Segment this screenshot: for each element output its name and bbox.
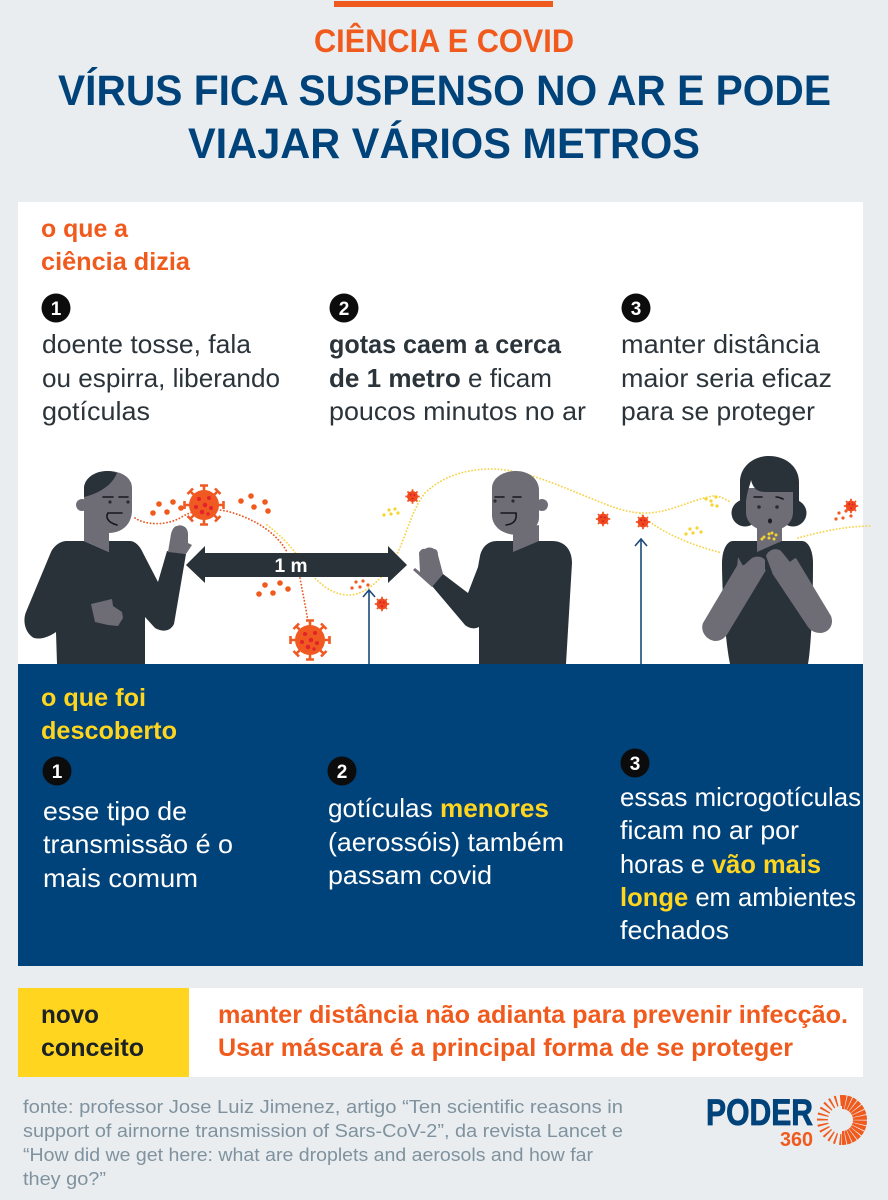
- step 3: [621, 294, 832, 426]
- source: they go?”: [23, 1168, 106, 1189]
- panel: o que a ciência dizia: [18, 202, 863, 664]
- step 1: doente tosse, fala: [42, 329, 252, 359]
- person: speaker left: [24, 471, 192, 664]
- step 3: para se proteger: [621, 396, 815, 426]
- finding 1: esse tipo de: [43, 796, 187, 826]
- arrow: 1 m distance: [186, 546, 407, 583]
- step 2: gotas caem a cerca: [329, 329, 562, 359]
- heading: o que foi descoberto: descoberto: [41, 717, 177, 745]
- person: listener middle: [413, 471, 572, 664]
- step 1: gotículas: [42, 396, 150, 426]
- top accent bar: [334, 1, 553, 7]
- arrow: 1 m distance: 1 m: [274, 556, 308, 577]
- droplets: orange: [150, 493, 853, 597]
- finding 1: transmissão é o: [43, 829, 233, 859]
- step 3: maior seria eficaz: [621, 363, 832, 393]
- step 1: 1: [51, 299, 62, 320]
- conclusion text: Usar máscara é a principal forma de se proteger: [218, 1034, 793, 1062]
- virus particles: [184, 485, 858, 660]
- label: novo conceito: [18, 988, 189, 1077]
- arrow: up short: [363, 590, 375, 664]
- step 2: 2: [339, 299, 349, 320]
- step 2: poucos minutos no ar: [329, 396, 586, 426]
- finding 2: 2: [337, 762, 347, 783]
- kicker: CIÊNCIA E COVID: [314, 23, 574, 59]
- panel: novo conceito: [18, 988, 863, 1077]
- step 3: 3: [631, 299, 641, 320]
- finding 1: mais comum: [43, 863, 198, 893]
- finding 1: [42, 756, 233, 893]
- arrow: up tall: [635, 539, 647, 664]
- source: fonte: professor Jose Luiz Jimenez, artigo “Ten scientific reasons in: [23, 1096, 623, 1117]
- source: “How did we get here: what are droplets and aerosols and how far: [23, 1144, 593, 1165]
- finding 2: (aerossóis) também: [328, 827, 564, 857]
- finding 3: fechados: [620, 915, 729, 945]
- heading: o que foi descoberto: [41, 684, 177, 745]
- step 3: manter distância: [621, 329, 821, 359]
- title: VIAJAR VÁRIOS METROS: [188, 120, 700, 168]
- step 1: [42, 294, 280, 426]
- source: [23, 1096, 623, 1189]
- finding 3: ficam no ar por: [620, 815, 799, 845]
- panel: o que foi descoberto: [18, 664, 863, 966]
- person: woman right: [702, 456, 832, 664]
- heading: o que a ciência dizia: [41, 215, 191, 276]
- finding 2: [328, 756, 564, 890]
- label: novo conceito: conceito: [41, 1034, 144, 1062]
- label: novo conceito: novo: [41, 1001, 99, 1029]
- logo: Poder360: 360: [780, 1129, 813, 1151]
- step 2: [329, 294, 586, 426]
- title: VÍRUS FICA SUSPENSO NO AR E PODE: [58, 67, 831, 115]
- heading: o que a ciência dizia: ciência dizia: [41, 248, 191, 276]
- finding 2: passam covid: [328, 860, 492, 890]
- logo: Poder360: [706, 1092, 860, 1151]
- heading: o que a ciência dizia: o que a: [41, 215, 129, 243]
- finding 3: longe em ambientes: [620, 882, 856, 912]
- heading: o que foi descoberto: o que foi: [41, 684, 146, 712]
- finding 2: gotículas menores: [328, 793, 549, 823]
- conclusion text: [218, 1001, 848, 1062]
- conclusion text: manter distância não adianta para prevenir infecção.: [218, 1001, 848, 1029]
- source: support of airnorne transmission of Sars-CoV-2”, da revista Lancet e: [23, 1120, 623, 1141]
- step 2: de 1 metro e ficam: [329, 363, 552, 393]
- finding 3: essas microgotículas: [620, 782, 861, 812]
- finding 3: 3: [630, 754, 640, 775]
- finding 3: horas e vão mais: [620, 849, 821, 879]
- aerosol dotted trails: [135, 469, 872, 622]
- title: [58, 67, 831, 168]
- finding 1: 1: [52, 762, 63, 783]
- droplets: yellow: [382, 495, 719, 536]
- logo: Poder360: PODER: [706, 1092, 813, 1133]
- finding 3: [620, 748, 861, 945]
- step 1: ou espirra, liberando: [42, 363, 280, 393]
